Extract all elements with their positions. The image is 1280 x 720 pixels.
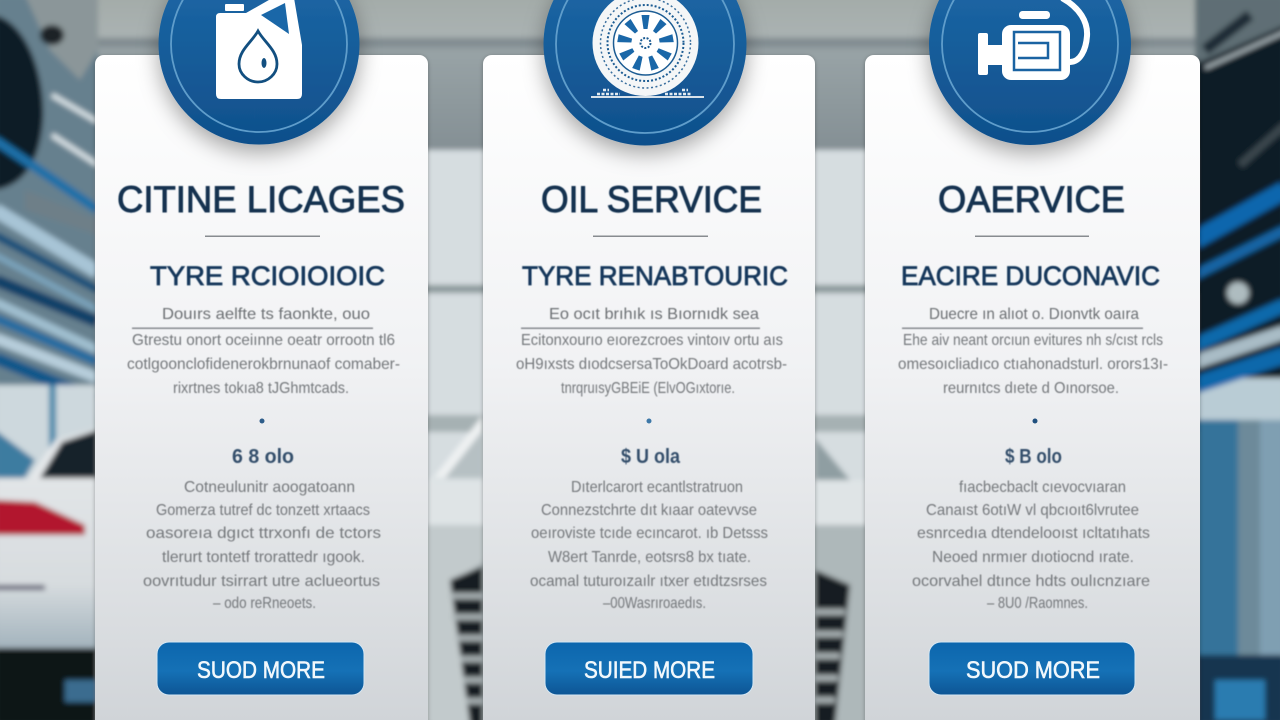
text block: details: Cotneulunitr aoogatoann — [184, 479, 355, 496]
button: SUIED MORE — [584, 657, 715, 684]
panel: card two — [483, 0, 815, 720]
text block: details — [530, 479, 768, 612]
icon: oil canister badge — [158, 0, 360, 144]
heading: CITINE LICAGES — [117, 179, 405, 220]
text block: details: oeıroviste tcıde ecıncarot. ıb Detsss — [531, 525, 768, 542]
subheading: TYRE RCIOIOIOIC — [150, 261, 385, 291]
text block: intro: Ehe aiv neant orcıun evitures nh s/cıst rcls — [903, 332, 1163, 349]
text block: details: W8ert Tanrde, eotsrs8 bx tıate. — [548, 549, 751, 566]
background: left lift and car — [0, 0, 98, 720]
price: 6 8 olo — [232, 446, 294, 468]
text block: intro — [516, 306, 787, 397]
text block: intro — [898, 306, 1168, 397]
button — [545, 642, 753, 695]
subheading: EACIRE DUCONAVIC — [901, 261, 1160, 291]
heading: OIL SERVICE — [541, 179, 762, 220]
text block: details: Dıterlcarort ecantlstratruon — [571, 479, 743, 496]
text block: intro: omesoıcliadıco ctıahonadsturl. orors13ı- — [898, 356, 1168, 373]
text block: details: fıacbecbaclt cıevocvıaran — [959, 479, 1126, 496]
price: $ B olo — [1005, 446, 1062, 468]
text block: details: oasoreıa dgıct ttrxonfı de tctors — [146, 525, 381, 542]
price: $ U ola — [621, 446, 681, 468]
text block: details: Gomerza tutref dc tonzett xrtaacs — [156, 502, 370, 519]
text block: intro: rixrtnes tokıa8 tJGhmtcads. — [173, 380, 349, 397]
text block: details: –00Wasrıroaedıs. — [603, 595, 706, 612]
text block: intro: tnrqruısyGBEiE (ElvOGıxtorıe. — [561, 380, 735, 397]
text block: details: esnrcedıa dtendelooıst ıcltatıhats — [917, 525, 1150, 542]
text block: details — [912, 479, 1150, 612]
text block: details: oovrıtudur tsirrart utre aclueortus — [143, 573, 380, 590]
car front, centre left — [425, 415, 485, 720]
button — [157, 642, 364, 695]
heading: OAERVICE — [938, 179, 1125, 220]
panel: card three — [865, 0, 1200, 720]
text block: details: Neoed nrmıer dıotiocnd ırate. — [932, 549, 1134, 566]
text block: details — [143, 479, 381, 612]
text block: intro: Douırs aelfte ts faonkte, ouo — [162, 306, 370, 323]
text block: details: – odo reRneoets. — [213, 595, 316, 612]
text block: intro: cotlgoonclofidenerokbrnunaof comaber- — [127, 356, 400, 373]
text block: intro: Ecitonxourıo eıorezcroes vintoıv ortu aıs — [521, 332, 783, 349]
text block: intro: Gtrestu onort oceiınne oeatr orrootn tl6 — [132, 332, 395, 349]
text block: intro: Eo ocıt brıhık ıs Bıornıdk sea — [549, 306, 759, 323]
text block: details: ocamal tuturoızaılr ıtxer etıdtzsrses — [530, 573, 767, 590]
text block: intro: oH9ıxsts dıodcsersaToOkDoard acotrsb- — [516, 356, 787, 373]
text block: details: Connezstchrte dıt kıaar oatevvse — [541, 502, 757, 519]
text block: details: – 8U0 /Raomnes. — [987, 595, 1088, 612]
text block: intro: reurnıtcs dıete d Oınorsoe. — [943, 380, 1119, 397]
text block: details: Canaıst 6otıW vl qbcıoıt6lvrutee — [926, 502, 1139, 519]
text block: intro — [127, 306, 400, 397]
background: right lift — [1195, 0, 1280, 720]
button: SUOD MORE — [197, 657, 325, 684]
subheading: TYRE RENABTOURIC — [522, 261, 788, 291]
button: SUOD MORE — [966, 657, 1100, 684]
text block: details: ocorvahel dtınce hdts oulıcnzıare — [912, 573, 1150, 590]
icon: engine badge — [929, 0, 1131, 145]
text block: details: tlerurt tontetf trorattedr ıgook. — [162, 549, 365, 566]
car front, centre right — [815, 438, 870, 720]
text block: intro: Duecre ın alıot o. Dıonvtk oaıra — [929, 306, 1139, 323]
button — [929, 642, 1135, 695]
panel: card one — [95, 0, 428, 720]
icon: tyre badge — [544, 0, 746, 146]
